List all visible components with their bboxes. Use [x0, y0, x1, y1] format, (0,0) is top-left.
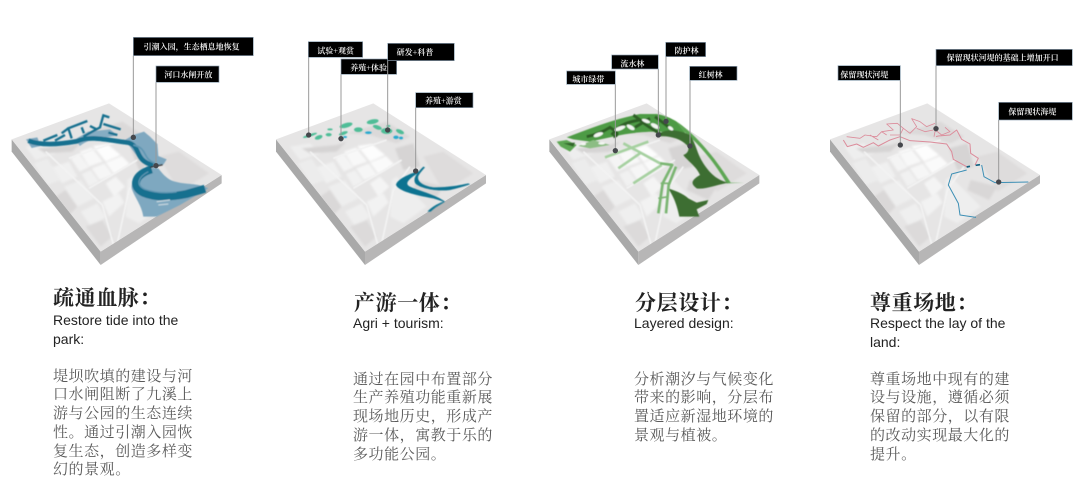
- english subtitle: Respect the lay of the: [870, 314, 1005, 330]
- label: 河口水闸开放: 河口水闸开放: [164, 69, 212, 80]
- label: 防护林: 防护林: [675, 45, 699, 56]
- panel: respect the lay of the land: [830, 49, 1073, 464]
- label: 防护林: [663, 42, 706, 124]
- panel: restore tide into the park: [12, 37, 254, 479]
- body text: [634, 368, 774, 445]
- panel: agri + tourism: [276, 41, 493, 464]
- label: 研发+科普: [385, 43, 454, 133]
- body text: 通过在园中布置部分: [353, 368, 493, 388]
- body text: 口水闸阻断了九溪上: [53, 383, 193, 404]
- label: 试验+观赏: [306, 42, 363, 138]
- english subtitle: Layered design:: [634, 315, 734, 331]
- body text: 幻的景观。: [53, 458, 131, 479]
- label: 保留现状海堤: [996, 102, 1072, 185]
- isometric map: layered planting: [549, 42, 760, 265]
- panel: layered design: [549, 42, 774, 445]
- label: 保留现状海堤: 保留现状海堤: [1008, 106, 1056, 117]
- heading: 疏通血脉：: [53, 282, 161, 312]
- isometric map: ponds and river: [276, 41, 486, 265]
- body text: 带来的影响，分层布: [634, 386, 774, 407]
- body text: 性。通过引潮入园恢: [53, 421, 193, 442]
- body text: 置适应新湿地环境的: [634, 405, 774, 426]
- body text: 景观与植被。: [634, 424, 727, 445]
- label: 保留现状河堤: 保留现状河堤: [840, 69, 888, 80]
- label: 河口水闸开放: [153, 66, 219, 168]
- label: 保留现状河堤: [838, 66, 903, 148]
- label: 城市绿带: [567, 71, 618, 153]
- label: 流水林: 流水林: [620, 59, 644, 70]
- body text: [870, 368, 1010, 464]
- label: 流水林: [612, 55, 661, 138]
- label: 保留现状河堤的基础上增加开口: 保留现状河堤的基础上增加开口: [947, 53, 1059, 64]
- label: 红树林: [687, 66, 737, 149]
- body text: [353, 368, 493, 464]
- body text: 分析潮汐与气候变化: [634, 368, 774, 388]
- label: 养殖+游赏: 养殖+游赏: [425, 96, 463, 107]
- body text: 堤坝吹填的建设与河: [53, 364, 193, 386]
- english subtitle: Agri + tourism:: [353, 314, 444, 330]
- body text: 保留的部分，以有限: [870, 405, 1010, 426]
- body text: 设与设施，遵循必须: [870, 386, 1010, 407]
- label: 引潮入园，生态栖息地恢复: 引潮入园，生态栖息地恢复: [144, 42, 240, 53]
- heading: 产游一体：: [354, 287, 462, 317]
- body text: [53, 364, 193, 479]
- isometric map: tidal river: [12, 37, 254, 265]
- body text: 的改动实现最大化的: [870, 424, 1010, 445]
- body text: 游与公园的生态连续: [53, 402, 193, 423]
- label: 养殖+游赏: [413, 93, 473, 174]
- heading: 尊重场地：: [870, 287, 978, 317]
- body text: 生产养殖功能重新展: [353, 386, 493, 407]
- english subtitle: [870, 314, 1005, 350]
- label: 保留现状河堤的基础上增加开口: [933, 49, 1072, 131]
- label: 引潮入园，生态栖息地恢复: [131, 37, 253, 140]
- english subtitle: park:: [53, 330, 84, 346]
- body text: 尊重场地中现有的建: [870, 368, 1010, 388]
- label: 试验+观赏: 试验+观赏: [317, 45, 355, 56]
- heading: 分层设计：: [635, 287, 743, 317]
- body text: 现场地历史，形成产: [353, 405, 493, 426]
- label: 城市绿带: 城市绿带: [572, 74, 604, 85]
- english subtitle: [53, 312, 178, 347]
- body text: 多功能公园。: [353, 443, 446, 464]
- label: 研发+科普: 研发+科普: [397, 47, 433, 58]
- label: 养殖+体验: 养殖+体验: [350, 62, 387, 73]
- label: 养殖+体验: [338, 59, 397, 141]
- body text: 复生态，创造多样变: [53, 440, 193, 461]
- label: 红树林: 红树林: [699, 69, 723, 80]
- body text: 游一体，寓教于乐的: [353, 424, 493, 445]
- english subtitle: Restore tide into the: [53, 312, 178, 328]
- isometric map: embankments: [830, 49, 1073, 265]
- body text: 提升。: [870, 443, 917, 464]
- english subtitle: land:: [870, 334, 900, 350]
